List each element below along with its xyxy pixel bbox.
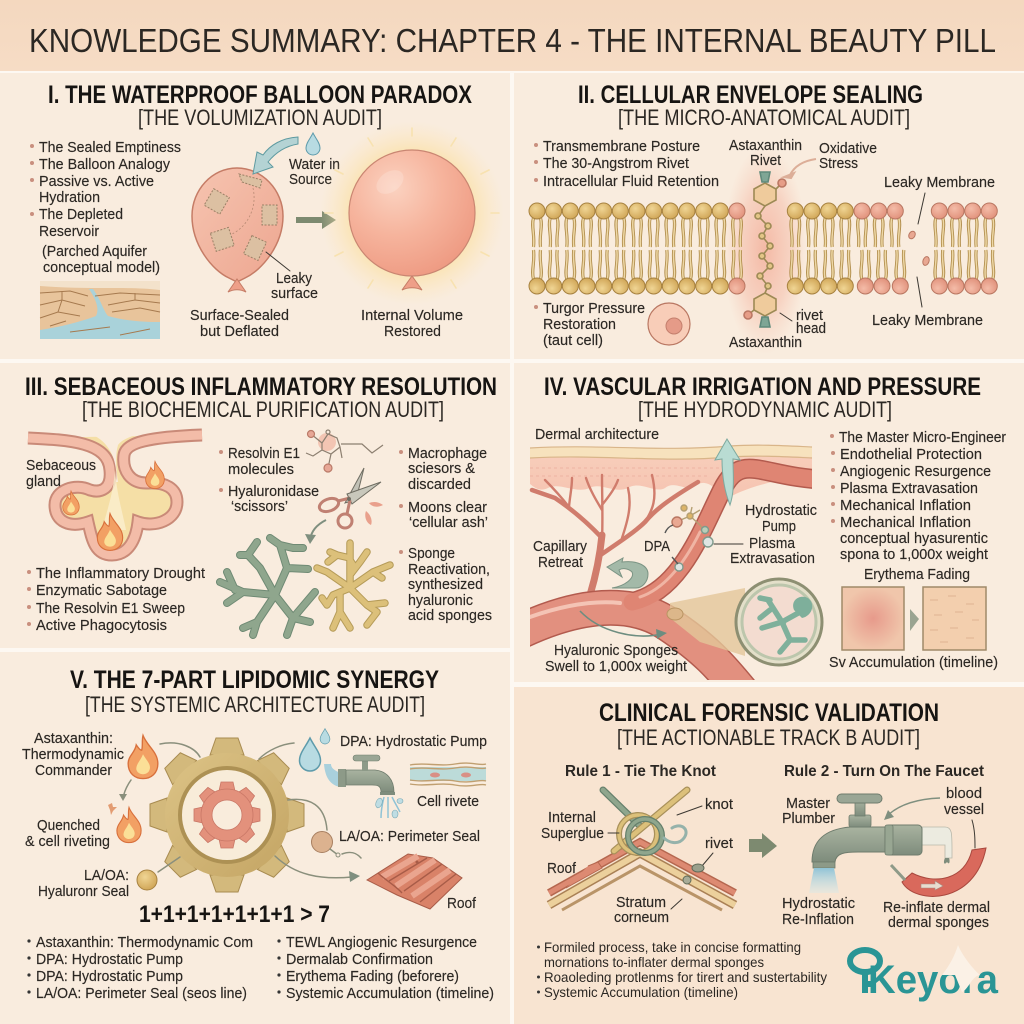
label: hyaluronic sponges: Hyaluronic Sponges	[554, 642, 678, 659]
label: internal superglue: Internal	[548, 809, 596, 826]
bullet list IV: Plasma Extravasation	[840, 480, 978, 497]
text: turgor pressure: Turgor Pressure	[543, 300, 645, 317]
heading I: [THE VOLUMIZATION AUDIT]	[138, 105, 382, 130]
label: oxidative stress	[784, 140, 877, 178]
label: leaky membrane upper	[884, 174, 995, 224]
label: master plumber: Plumber	[782, 810, 835, 827]
label: knot: knot	[705, 796, 734, 813]
heading III	[25, 373, 497, 422]
label: astaxanthin commander: Thermodynamic	[22, 746, 124, 763]
label: hyaluronic seal: Hyaluronr Seal	[38, 883, 129, 900]
label: leaky membrane lower	[872, 277, 983, 329]
icon: deflated balloon	[192, 168, 283, 292]
label: sebaceous gland: gland	[26, 473, 61, 490]
icon: scissors	[318, 468, 383, 528]
label: oxidative stress: Stress	[819, 155, 858, 172]
text: macrophage and sponge list: acid sponges	[408, 607, 492, 624]
label: surface-sealed: Surface-Sealed	[190, 307, 289, 324]
heading V: [THE SYSTEMIC ARCHITECTURE AUDIT]	[85, 692, 425, 717]
icon: inner gear	[194, 782, 260, 848]
bullet list I: (Parched Aquifer	[42, 243, 147, 260]
label: hyaluronic sponges	[545, 642, 688, 675]
arrow: capillary retreat	[607, 558, 648, 588]
arrow: rule 1 to rule 2	[749, 833, 777, 858]
heading II: II. CELLULAR ENVELOPE SEALING	[578, 81, 923, 109]
text: macrophage and sponge list: synthesized	[408, 576, 483, 593]
bullet list I: The Sealed Emptiness	[39, 139, 181, 156]
label: oxidative stress: Oxidative	[819, 140, 877, 157]
label: rivet head: head	[796, 320, 826, 337]
bullet list VI	[537, 939, 827, 1000]
bullet list V right: Erythema Fading (beforere)	[286, 968, 459, 985]
arrow: pressure up	[715, 439, 740, 505]
label: roof: Roof	[447, 895, 477, 912]
label: master plumber	[782, 795, 835, 827]
heading VI	[599, 699, 939, 750]
bullet list III left: The Resolvin E1 Sweep	[36, 600, 185, 617]
label: cell rivet: Cell rivete	[417, 793, 479, 810]
bullet list VI: Formiled process, take in concise formatting	[544, 939, 801, 955]
bullet list III left: Active Phagocytosis	[36, 617, 167, 634]
label: roof: Roof	[547, 860, 577, 877]
label: astaxanthin commander: Commander	[35, 762, 112, 779]
label: hydrostatic pump: Pump	[762, 518, 796, 535]
logo: Keyora: Keyora	[868, 958, 999, 1002]
label: astaxanthin rivet: Rivet	[750, 152, 782, 169]
heading V	[70, 666, 439, 717]
bullet list IV: spona to 1,000x weight	[840, 546, 989, 563]
label: re-inflate: dermal sponges	[888, 914, 989, 931]
heading I	[48, 81, 472, 130]
bullet list VI: Roaoleding protlenms for tirert and sustertability	[544, 969, 827, 985]
text: resolvin and hyaluronidase: Resolvin E1	[228, 445, 300, 462]
icon: water drops	[300, 729, 330, 771]
label: stratum corneum: corneum	[614, 909, 669, 926]
icon: large flame	[128, 735, 158, 779]
icon: taut cell	[648, 303, 690, 345]
connector: gear to drops	[259, 743, 294, 759]
label: re-inflate: Re-inflate dermal	[883, 899, 990, 916]
label: leaky surface: Leaky	[276, 270, 312, 287]
arrow: water in	[253, 137, 298, 174]
label: hyaluronic seal	[38, 867, 129, 900]
label: hyaluronic sponges: Swell to 1,000x weight	[545, 658, 688, 675]
heading II	[578, 81, 923, 130]
arrow: artery flow	[580, 611, 667, 639]
label: rivet: rivet	[705, 835, 734, 852]
icon: water drop	[306, 133, 320, 155]
heading VI: [THE ACTIONABLE TRACK B AUDIT]	[617, 725, 920, 750]
text: macrophage and sponge list	[399, 445, 492, 624]
text: macrophage and sponge list: sciesors &	[408, 460, 475, 477]
icon: green hyaluronic sponge	[220, 538, 315, 635]
icon: astaxanthin molecule rivet	[744, 172, 786, 327]
bullet list IV: Mechanical Inflation	[840, 497, 971, 514]
bullet list IV	[830, 429, 1006, 563]
text: macrophage and sponge list: Reactivation,	[408, 561, 490, 578]
arrow: scissors to sponges	[305, 520, 326, 544]
text: resolvin and hyaluronidase: Hyaluronidase	[228, 483, 319, 500]
label: astaxanthin rivet: Astaxanthin	[729, 137, 802, 154]
connector: gear to perimeter seal	[288, 799, 327, 830]
icon: roof tiles	[367, 854, 462, 909]
callout cone	[670, 588, 745, 656]
label: internal superglue: Superglue	[541, 825, 604, 842]
label: blood vessel: blood	[946, 785, 982, 802]
bullet list V right: Systemic Accumulation (timeline)	[286, 985, 494, 1002]
heading III: [THE BIOCHEMICAL PURIFICATION AUDIT]	[82, 397, 444, 422]
label: perimeter seal: LA/OA: Perimeter Seal	[339, 828, 480, 845]
text: turgor pressure: (taut cell)	[543, 332, 603, 349]
arrow: deflated to restored	[296, 211, 336, 229]
label: surface-sealed	[190, 307, 289, 340]
bullet list I	[30, 139, 181, 276]
heading VI: CLINICAL FORENSIC VALIDATION	[599, 699, 939, 727]
text: macrophage and sponge list: ‘cellular ash’	[409, 514, 488, 531]
arrow: flame to quenched	[119, 780, 131, 801]
icon: cell rivet membrane	[410, 763, 486, 786]
connector: flame to gear	[160, 743, 200, 757]
bullet list II	[534, 138, 719, 190]
icon: parched aquifer	[40, 281, 160, 339]
heading II: [THE MICRO-ANATOMICAL AUDIT]	[618, 105, 910, 130]
icon: tan sphere	[312, 832, 361, 858]
bullet list V left: Astaxanthin: Thermodynamic Com	[36, 934, 253, 951]
label: plasma extravasation	[714, 535, 815, 567]
label: quenched: & cell riveting	[25, 833, 110, 850]
label: internal volume	[361, 307, 463, 340]
label: rivet head: rivet	[796, 307, 824, 324]
label: leaky surface: surface	[271, 285, 318, 302]
label: DPA pump: DPA: Hydrostatic Pump	[340, 733, 487, 750]
panel: II cellular envelope sealing	[514, 73, 1024, 359]
bullet list IV: The Master Micro-Engineer	[839, 429, 1006, 446]
icon: master plumber faucet	[809, 794, 952, 893]
label: knot	[677, 796, 734, 815]
label: hydrostatic re-inflation: Re-Inflation	[782, 911, 854, 928]
label: plasma extravasation: Extravasation	[730, 550, 815, 567]
bullet list I: Hydration	[39, 189, 100, 206]
label: hydrostatic pump: Hydrostatic	[745, 502, 817, 519]
text: turgor pressure	[534, 300, 645, 349]
label: rivet	[683, 835, 734, 884]
arrow: blood vessel to faucet	[884, 798, 940, 820]
icon: sebaceous gland	[28, 424, 202, 555]
label: DPA: DPA	[644, 538, 670, 555]
icon: sponge inset	[736, 579, 822, 665]
label: leaky membrane upper: Leaky Membrane	[884, 174, 995, 191]
icon: roof chevron	[549, 842, 735, 910]
icon: restored balloon	[320, 121, 504, 305]
bullet list V right: TEWL Angiogenic Resurgence	[286, 934, 477, 951]
label: plasma extravasation: Plasma	[749, 535, 796, 552]
rule 2 heading: Rule 2 - Turn On The Faucet	[784, 763, 984, 780]
icon: blood vessel	[891, 848, 986, 896]
bullet list IV: Mechanical Inflation	[840, 514, 971, 531]
label: rivet head	[780, 307, 826, 337]
label: quenched	[25, 817, 110, 850]
label: stratum corneum	[614, 894, 682, 926]
icon: gold hyaluronic sponge	[317, 543, 390, 628]
label: blood vessel	[944, 785, 984, 848]
icon: main gear	[150, 738, 304, 892]
text: macrophage and sponge list: Sponge	[408, 545, 455, 562]
icon: resolvin molecule	[306, 430, 383, 472]
panel: III sebaceous inflammatory resolution	[0, 363, 510, 648]
icon: small flame	[117, 807, 141, 843]
heading V: V. THE 7-PART LIPIDOMIC SYNERGY	[70, 666, 439, 694]
bullet list II: Intracellular Fluid Retention	[543, 173, 719, 190]
lipid bilayer	[529, 203, 997, 294]
label: hydrostatic re-inflation: Hydrostatic	[782, 895, 855, 912]
bullet list I: The Depleted	[39, 206, 123, 223]
icon: plaque	[667, 608, 683, 620]
arrow: gear to roof	[275, 856, 360, 882]
heading IV	[544, 373, 981, 422]
text: resolvin and hyaluronidase: ‘scissors’	[231, 498, 288, 515]
label: sebaceous gland: Sebaceous	[26, 457, 96, 474]
icon: skin before	[842, 587, 904, 650]
label: dermal architecture: Dermal architecture	[535, 426, 659, 443]
heading IV: [THE HYDRODYNAMIC AUDIT]	[638, 397, 892, 422]
logo: Keyora	[850, 945, 999, 1002]
label: stratum corneum: Stratum	[616, 894, 666, 911]
text: turgor pressure: Restoration	[543, 316, 616, 333]
label: astaxanthin rivet	[729, 137, 802, 169]
label: leaky membrane lower: Leaky Membrane	[872, 312, 983, 329]
bullet list VI: Systemic Accumulation (timeline)	[544, 984, 738, 1000]
bullet list V left: DPA: Hydrostatic Pump	[36, 951, 183, 968]
label: internal volume: Restored	[384, 323, 441, 340]
panel: I waterproof balloon paradox	[0, 73, 510, 359]
bullet list V left	[27, 934, 253, 1002]
label: hyaluronic seal: LA/OA:	[84, 867, 129, 884]
label: capillary retreat: Retreat	[538, 554, 584, 571]
molecule glow	[723, 145, 807, 355]
text: macrophage and sponge list: discarded	[408, 476, 471, 493]
label: accumulation timeline: Sv Accumulation (timeline)	[829, 654, 998, 671]
label: capillary retreat: Capillary	[533, 538, 587, 555]
label: water in source: Water in	[289, 156, 340, 173]
icon: skin after	[923, 587, 986, 650]
icon: DPA molecule	[665, 505, 713, 571]
icon: gold sphere	[137, 857, 180, 890]
bullet list VI: mornations to-inflater dermal sponges	[544, 954, 764, 970]
text: resolvin and hyaluronidase: molecules	[228, 461, 294, 478]
label: sebaceous gland	[26, 457, 96, 490]
bullet list I: The Balloon Analogy	[39, 156, 170, 173]
equation: 1+1+1+1+1+1+1 > 7	[139, 901, 330, 928]
rule 1 heading: Rule 1 - Tie The Knot	[565, 763, 716, 780]
bullet list IV: Endothelial Protection	[840, 446, 982, 463]
bullet list IV: conceptual hyasurentic	[840, 530, 988, 547]
label: water in source	[289, 156, 340, 188]
heading III: III. SEBACEOUS INFLAMMATORY RESOLUTION	[25, 373, 497, 401]
label: leaky surface	[266, 252, 318, 302]
bullet list I: Passive vs. Active	[39, 173, 154, 190]
bullet list V left: LA/OA: Perimeter Seal (seos line)	[36, 985, 247, 1002]
bullet list I: conceptual model)	[43, 259, 160, 276]
heading I: I. THE WATERPROOF BALLOON PARADOX	[48, 81, 472, 109]
panel: IV vascular irrigation and pressure	[514, 363, 1024, 700]
icon: main artery and branch	[530, 458, 812, 680]
label: surface-sealed: but Deflated	[200, 323, 279, 340]
bullet list III left: The Inflammatory Drought	[36, 565, 206, 582]
label: astaxanthin: Astaxanthin	[729, 334, 802, 351]
arrow: before to after	[910, 609, 919, 631]
label: internal superglue	[541, 809, 619, 842]
label: erythema fading: Erythema Fading	[864, 566, 970, 583]
icon: knot	[603, 790, 687, 853]
panel: V lipidomic synergy	[0, 652, 510, 1024]
title banner	[0, 0, 1024, 71]
bullet list III left	[27, 565, 206, 634]
bullet list V right: Dermalab Confirmation	[286, 951, 433, 968]
text: macrophage and sponge list: Macrophage	[408, 445, 487, 462]
bullet list II: The 30-Angstrom Rivet	[543, 155, 690, 172]
bullet list III left: Enzymatic Sabotage	[36, 582, 167, 599]
label: astaxanthin commander	[22, 730, 124, 779]
bullet list IV: Angiogenic Resurgence	[840, 463, 991, 480]
text: resolvin and hyaluronidase	[219, 445, 319, 515]
label: hydrostatic re-inflation	[782, 895, 855, 928]
bullet list V right	[277, 934, 494, 1002]
bullet list II: Transmembrane Posture	[543, 138, 700, 155]
label: blood vessel: vessel	[944, 801, 984, 818]
bullet list I: Reservoir	[39, 223, 99, 240]
label: capillary retreat	[533, 538, 587, 571]
icon: skin layers	[530, 445, 812, 500]
bullet list V left: DPA: Hydrostatic Pump	[36, 968, 183, 985]
label: water in source: Source	[289, 171, 332, 188]
label: internal volume: Internal Volume	[361, 307, 463, 324]
label: astaxanthin commander: Astaxanthin:	[34, 730, 113, 747]
label: master plumber: Master	[786, 795, 830, 812]
text: macrophage and sponge list: hyaluronic	[408, 592, 473, 609]
label: re-inflate	[883, 899, 990, 931]
panel: clinical forensic validation	[514, 687, 1024, 1024]
text: macrophage and sponge list: Moons clear	[408, 499, 487, 516]
icon: ember	[108, 803, 117, 815]
icon: capillary tree	[532, 475, 698, 595]
label: hydrostatic pump	[745, 502, 817, 535]
label: quenched: Quenched	[37, 817, 100, 834]
icon: faucet	[324, 755, 403, 818]
